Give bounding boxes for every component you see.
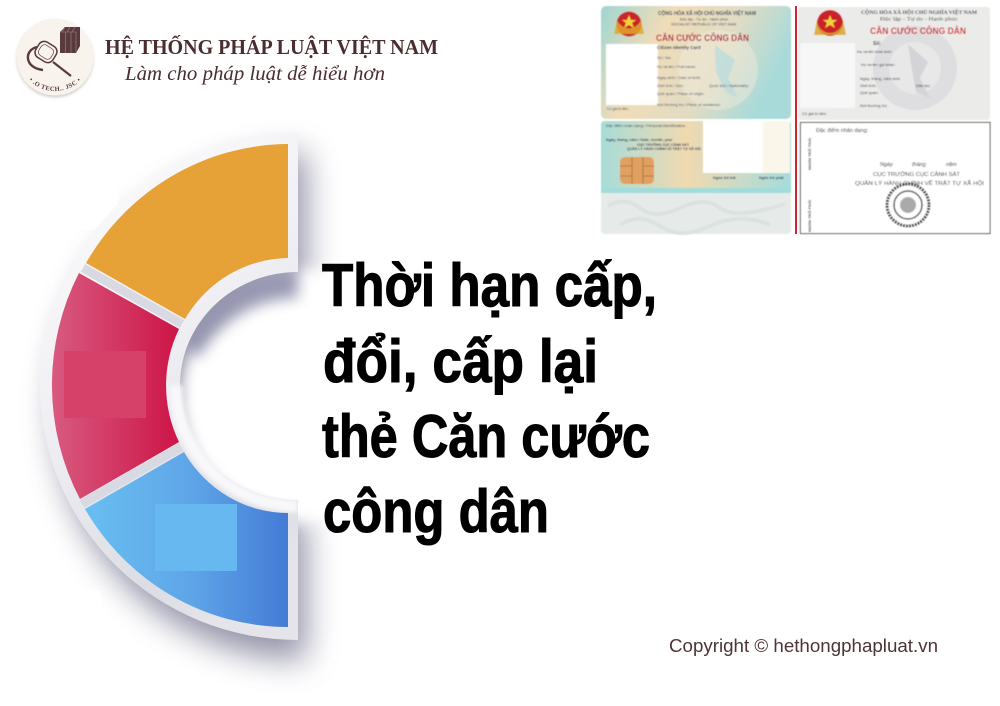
card: new back: Ngón trỏ phải — [759, 176, 784, 180]
card: old front: Nơi thường trú: — [860, 103, 888, 108]
title: đổi, cấp lại — [323, 328, 598, 395]
card: old front: Ngày, tháng, năm sinh: — [860, 76, 901, 81]
card: old back: QUẢN LÝ HÀNH CHÍNH VỀ TRẬT TỰ XÃ HỘI — [855, 180, 985, 187]
card: new back — [601, 121, 791, 234]
site name: HỆ THỐNG PHÁP LUẬT VIỆT NAM — [105, 35, 438, 59]
title: công dân — [323, 478, 549, 545]
ID cards — [601, 6, 990, 234]
title: Thời hạn cấp, — [322, 252, 657, 319]
icon: gavel — [28, 39, 71, 76]
logo seal text: • .O TECH.. JSC • — [30, 78, 80, 92]
ring shadow — [0, 120, 438, 706]
copyright: Copyright © hethongphapluat.vn — [669, 636, 938, 656]
card: old back: NGÓN TRỎ TRÁI — [807, 138, 812, 170]
card: new front: Số / No: — [657, 55, 671, 60]
card: old front: Họ và tên gọi khác: — [861, 62, 895, 67]
card: new front: Họ và tên / Full name: — [657, 64, 696, 69]
card: new front: Quê quán / Place of origin: — [657, 91, 704, 96]
card: new back: Đặc điểm nhân dạng / Personal identification — [606, 123, 685, 128]
card: old back: CỤC TRƯỞNG CỤC CẢNH SÁT — [873, 171, 961, 178]
segment: orange — [86, 144, 288, 319]
red divider — [795, 6, 797, 234]
title — [322, 252, 657, 545]
card: old front: Số: — [873, 40, 881, 47]
card: old front — [798, 7, 990, 120]
card: old front: CĂN CƯỚC CÔNG DÂN — [870, 25, 966, 36]
card: old back: Đặc điểm nhân dạng: — [816, 127, 869, 134]
logo — [15, 18, 95, 99]
card: new back: Ngày, tháng, năm / Date, month, year — [606, 138, 673, 142]
card: old back: NGÓN TRỎ PHẢI — [807, 200, 812, 232]
card: new front: SOCIALIST REPUBLIC OF VIET NAM — [671, 22, 736, 26]
card: new front — [601, 6, 791, 119]
card: old front: Quê quán: — [860, 90, 879, 95]
card: old back — [800, 122, 990, 234]
card: old front: Có giá trị đến: — [802, 111, 827, 116]
card: new back: CỤC TRƯỞNG CỤC CẢNH SÁT — [637, 142, 690, 147]
card: old back: tháng — [912, 162, 927, 168]
card: old front: Giới tính: — [860, 83, 876, 88]
card: new front: Độc lập - Tự do - Hạnh phúc — [680, 18, 728, 22]
card: new back: QUẢN LÝ HÀNH CHÍNH VỀ TRẬT TỰ XÃ HỘI — [627, 146, 701, 151]
card: new front: Quốc tịch / Nationality: — [709, 83, 749, 88]
card: new front: Giới tính / Sex: — [657, 83, 684, 88]
card: old front: Độc lập - Tự do - Hạnh phúc — [880, 18, 958, 22]
card: new front: Nơi thường trú / Place of residence: — [657, 102, 721, 107]
title: thẻ Căn cước — [322, 403, 650, 470]
segment: blue — [85, 452, 288, 627]
ring graphic — [0, 120, 438, 706]
card: new back: Ngón trỏ trái — [713, 176, 736, 180]
card: old front: CỘNG HÒA XÃ HỘI CHỦ NGHĨA VIỆT NAM — [861, 8, 977, 16]
card: new front: Ngày sinh / Date of birth: — [657, 75, 701, 80]
card: new front: Citizen Identity Card — [657, 45, 701, 50]
card: old front: Dân tộc: — [916, 83, 931, 88]
tagline: Làm cho pháp luật dễ hiểu hơn — [124, 63, 385, 85]
card: old back: Ngày — [880, 162, 894, 168]
icon: books — [60, 27, 80, 53]
card: old front: Họ và tên khai sinh: — [857, 49, 892, 54]
ring halo — [40, 133, 298, 640]
segment: red — [52, 273, 179, 499]
card: old back: năm — [946, 162, 957, 168]
card: new front: CỘNG HÒA XÃ HỘI CHỦ NGHĨA VIỆT NAM — [658, 9, 756, 17]
card: new front: Có giá trị đến: — [607, 107, 629, 111]
card: new front: CĂN CƯỚC CÔNG DÂN — [656, 32, 749, 44]
